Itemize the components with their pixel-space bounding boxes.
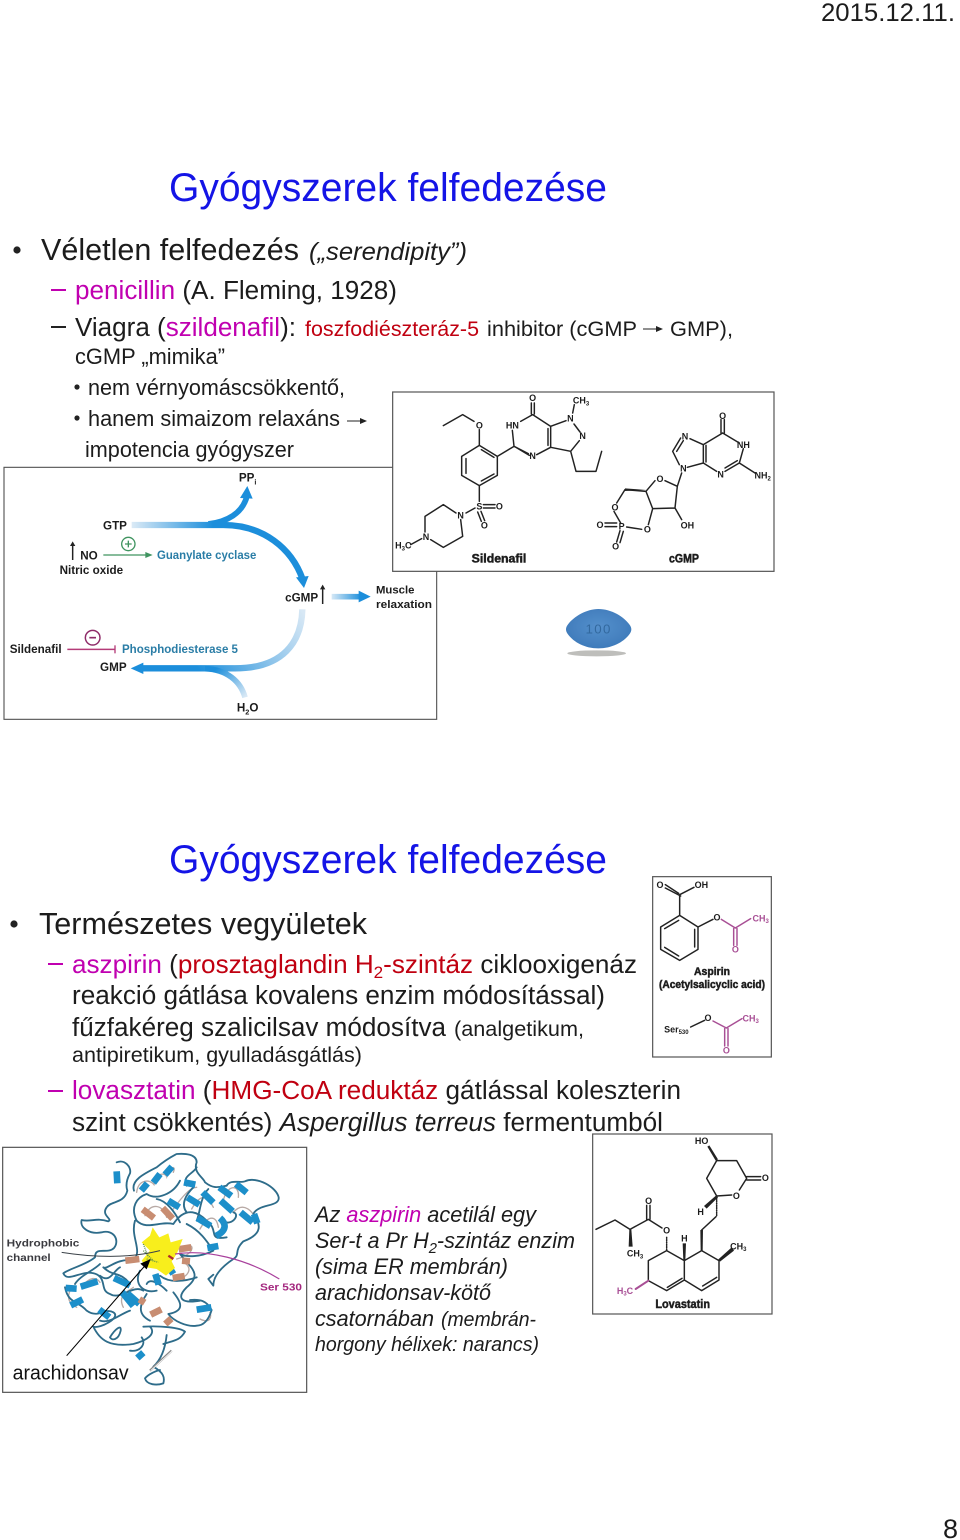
arrow: GTP to cGMP <box>132 486 309 588</box>
text block: slide 1 bullets: cGMP „mimika” <box>75 344 225 369</box>
molecule: sildenafil: N <box>567 414 574 424</box>
molecule: cGMP: N <box>682 431 688 441</box>
text block: slide 1 bullets <box>13 232 733 462</box>
pathway labels: GTP <box>103 520 127 533</box>
molecule: aspirin: Aspirin <box>694 966 730 978</box>
text block: slide 2 bullets: (analgetikum, <box>454 1018 584 1041</box>
molecule: lovastatin: HO <box>695 1136 708 1146</box>
activation: nitric oxide <box>70 537 153 560</box>
molecule: lovastatin <box>596 1136 769 1311</box>
text block: slide 1 bullets: foszfodiészteráz-5 <box>305 317 479 341</box>
molecule: acetylated Ser530: 3 <box>755 1019 759 1025</box>
molecule: sildenafil: N <box>579 431 586 441</box>
callout: Ser 530: Ser 530 <box>260 1283 302 1294</box>
text block: slide 2 bullets: ciklooxigenáz <box>480 949 636 979</box>
arrow: arachidonsav <box>67 1259 151 1356</box>
molecule: cGMP: O <box>611 503 618 513</box>
text block: slide 1 bullets: penicillin (A. Fleming, 1928) <box>75 277 397 305</box>
molecule: sildenafil: CH <box>573 396 586 406</box>
pathway labels: cGMP <box>285 592 318 605</box>
molecule: aspirin: O <box>713 912 720 922</box>
callout: hydrophobic channel <box>7 1239 160 1264</box>
molecule: lovastatin: O <box>645 1196 652 1206</box>
pathway labels: 2 <box>245 707 249 716</box>
icon: blue pill: 100 <box>586 621 612 636</box>
text block: slide 2 bullets <box>10 906 681 1137</box>
text block: slide 2 bullets: Természetes vegyületek <box>39 906 367 941</box>
arrow: cGMP to GMP <box>131 609 302 697</box>
molecule: sildenafil: N <box>529 451 536 461</box>
pathway labels <box>10 472 432 716</box>
panel: cGMP pathway diagram <box>4 467 437 719</box>
text block: slide 1 bullets: hanem simaizom relaxáns <box>88 406 340 431</box>
molecule: cGMP: O <box>596 520 603 530</box>
molecule: cGMP: P <box>619 522 625 532</box>
molecule: acetylated Ser530: 530 <box>679 1030 689 1036</box>
molecule: acetylated Ser530 <box>664 1013 759 1056</box>
icon: blue pill <box>566 609 631 656</box>
molecule: sildenafil: O <box>476 421 483 431</box>
text block: slide 2 bullets: antipiretikum, gyulladásgátlás) <box>72 1044 362 1067</box>
molecule: acetylated Ser530: CH <box>743 1013 755 1023</box>
text block: slide 1 bullets: Viagra (szildenafil): <box>75 314 296 342</box>
text block: aspirin mechanism: csatornában <box>315 1306 434 1331</box>
pathway labels: Muscle <box>376 585 414 597</box>
text block: slide 1 bullets: impotencia gyógyszer <box>85 437 294 462</box>
title: slide 1: Gyógyszerek felfedezése <box>169 166 607 210</box>
pathway labels: relaxation <box>376 599 432 611</box>
molecule: lovastatin: 3 <box>623 1292 627 1298</box>
panel: COX protein structure <box>3 1147 307 1392</box>
molecule: cGMP: O <box>719 411 726 421</box>
callout: hydrophobic channel: Hydrophobic <box>7 1239 80 1250</box>
text block: aspirin mechanism: (membrán- <box>441 1309 536 1331</box>
text block: slide 1 bullets: inhibitor (cGMP <box>487 317 637 341</box>
molecule: sildenafil: O <box>481 521 488 531</box>
text block: slide 1 bullets: („serendipity”) <box>309 238 467 266</box>
pathway labels: O <box>249 702 258 715</box>
molecule: sildenafil: 3 <box>402 546 406 552</box>
molecule: sildenafil: 3 <box>586 401 590 407</box>
molecule: aspirin: (Acetylsalicyclic acid) <box>659 979 765 991</box>
text block: aspirin mechanism: arachidonsav-kötő <box>315 1280 492 1305</box>
text block: aspirin mechanism: -szintáz enzim <box>437 1228 575 1253</box>
molecule: sildenafil: S <box>476 501 482 511</box>
text block: slide 2 bullets: szint csökkentés) Aspergillus terreus fermentumból <box>72 1109 663 1137</box>
protein backbone <box>63 1154 279 1385</box>
molecule: aspirin: O <box>732 945 739 955</box>
blue helices <box>66 1167 257 1358</box>
molecule: aspirin: O <box>656 880 663 890</box>
pathway labels: NO <box>80 549 98 562</box>
molecule: cGMP: OH <box>681 521 694 531</box>
text block: aspirin mechanism <box>313 1202 575 1356</box>
molecule: cGMP: O <box>644 525 651 535</box>
molecule: acetylated Ser530: Ser <box>664 1024 679 1034</box>
molecule: lovastatin: O <box>663 1225 670 1235</box>
inhibition: sildenafil <box>67 630 115 653</box>
molecule: cGMP: 2 <box>767 476 771 482</box>
molecule: lovastatin: 3 <box>743 1247 747 1253</box>
molecule: sildenafil: O <box>496 501 503 511</box>
panel: lovastatin structure <box>593 1134 772 1314</box>
pathway labels: Phosphodiesterase 5 <box>122 643 238 656</box>
text block: slide 2 bullets: lovasztatin (HMG-CoA reduktáz gátlással koleszterin <box>72 1077 681 1105</box>
text block: slide 1 bullets: GMP), <box>670 317 733 341</box>
molecule: sildenafil: H <box>395 541 402 551</box>
pathway labels: PP <box>239 472 254 485</box>
molecule: sildenafil <box>395 393 602 565</box>
text block: aspirin mechanism: 2 <box>428 1240 438 1257</box>
molecule: sildenafil: HN <box>506 421 519 431</box>
yellow hydrophobic channel <box>142 1227 183 1276</box>
orange helices <box>125 1208 191 1324</box>
molecule: cGMP: N <box>717 469 724 479</box>
pathway labels: i <box>254 477 256 486</box>
pathway labels: GMP <box>100 661 127 674</box>
text block: aspirin mechanism: horgony hélixek: narancs) <box>315 1334 539 1356</box>
molecule: aspirin: CH <box>753 913 765 923</box>
molecule: sildenafil: N <box>423 532 429 542</box>
molecule: sildenafil: C <box>405 541 412 551</box>
title: slide 2: Gyógyszerek felfedezése <box>169 838 607 882</box>
molecule: cGMP <box>596 411 771 565</box>
molecule: cGMP: O <box>656 474 663 484</box>
panel: sildenafil and cGMP structures <box>393 392 774 571</box>
molecule: cGMP: O <box>612 542 619 552</box>
molecule: cGMP: NH <box>754 471 767 481</box>
text block: slide 1 bullets: Véletlen felfedezés <box>41 232 299 267</box>
molecule: lovastatin: C <box>627 1286 634 1296</box>
molecule: lovastatin: H <box>681 1234 688 1244</box>
molecule: lovastatin: Lovastatin <box>655 1298 710 1311</box>
callout: hydrophobic channel: channel <box>7 1253 51 1264</box>
molecule: lovastatin: H <box>617 1286 623 1296</box>
molecule: sildenafil: O <box>529 393 536 403</box>
molecule: lovastatin: H <box>697 1207 704 1217</box>
molecule: lovastatin: O <box>762 1173 769 1183</box>
text block: slide 2 bullets: fűzfakéreg szalicilsav módosítva <box>72 1014 447 1042</box>
text block: slide 2 bullets: -szintáz <box>383 949 473 979</box>
molecule: lovastatin: 3 <box>640 1254 644 1260</box>
text block: aspirin mechanism: Az aszpirin acetilál egy <box>313 1202 538 1227</box>
text block: slide 2 bullets: 2 <box>374 963 383 982</box>
molecule: lovastatin: CH <box>627 1249 640 1259</box>
arrow: cGMP to muscle relaxation <box>332 591 371 602</box>
molecule: acetylated Ser530: O <box>723 1046 730 1056</box>
text block: slide 2 bullets: aszpirin (prosztaglandin H <box>72 949 373 979</box>
text block: aspirin mechanism: Ser-t a Pr H <box>315 1228 431 1253</box>
text block: slide 2 bullets: reakció gátlása kovalens enzim módosítással) <box>72 982 605 1010</box>
molecule: sildenafil: Sildenafil <box>472 552 526 565</box>
molecule: aspirin: OH <box>695 880 708 890</box>
pathway labels: Sildenafil <box>10 643 62 656</box>
molecule: cGMP: NH <box>737 440 750 450</box>
text block: slide 1 bullets: nem vérnyomáscsökkentő, <box>88 375 345 400</box>
molecule: sildenafil: N <box>457 510 464 520</box>
pathway labels: Guanylate cyclase <box>157 549 257 562</box>
molecule: aspirin <box>656 880 769 991</box>
label: arachidonsav: arachidonsav <box>13 1362 129 1384</box>
pathway labels: H <box>237 702 245 715</box>
molecule: lovastatin: CH <box>730 1241 743 1251</box>
text block: aspirin mechanism: (sima ER membrán) <box>315 1254 508 1279</box>
molecule: acetylated Ser530: O <box>704 1013 711 1023</box>
helix back strands <box>69 1168 258 1321</box>
callout: Ser 530 <box>175 1253 302 1294</box>
molecule: aspirin: 3 <box>765 919 769 925</box>
molecule: cGMP: N <box>680 463 687 473</box>
panel: aspirin structure <box>653 877 771 1057</box>
molecule: lovastatin: O <box>733 1191 740 1201</box>
molecule: cGMP: cGMP <box>669 552 699 565</box>
pathway labels: Nitric oxide <box>60 564 124 577</box>
